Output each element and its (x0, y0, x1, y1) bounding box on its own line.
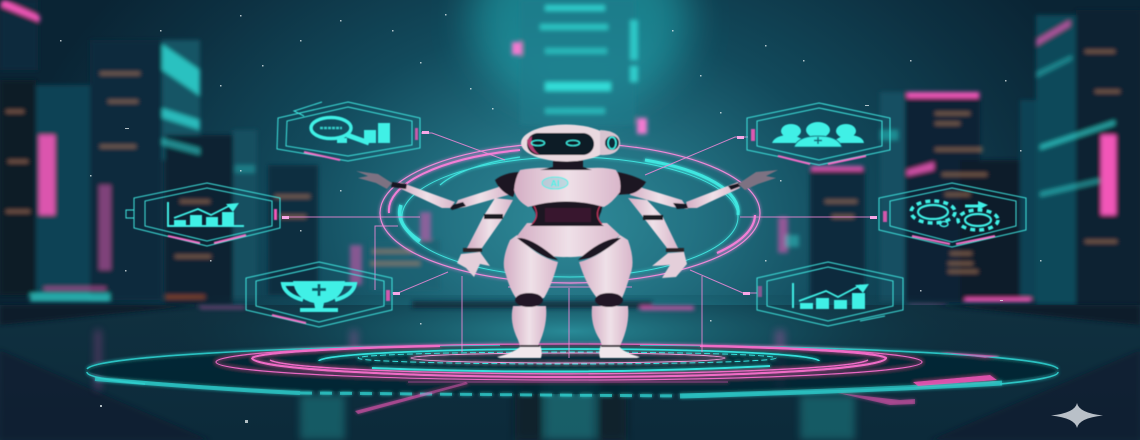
robot head (521, 124, 620, 162)
hexagon: growth chart left (126, 183, 280, 246)
top light glow (470, 0, 690, 110)
robot eyes (532, 140, 580, 146)
icon: three people (772, 122, 864, 147)
icon: bar chart with arrow (168, 202, 244, 226)
robot right shoulder (612, 171, 646, 195)
connector lines (282, 131, 877, 358)
outer dashed cyan ring (95, 379, 300, 393)
left building windows (6, 72, 420, 299)
icon: magnifier and bars (311, 118, 390, 143)
corner sparkle mark (1051, 403, 1103, 428)
central tower (512, 0, 647, 134)
robot torso (514, 168, 620, 207)
chest AI emblem: AI (550, 178, 560, 188)
hexagon: team (747, 103, 890, 165)
icon: gears and arrow (911, 201, 998, 230)
floor (0, 295, 1140, 440)
hexagon: trophy (246, 262, 392, 327)
right city buildings (778, 10, 1140, 310)
background sky (0, 0, 1140, 310)
hexagon: gears (879, 183, 1026, 247)
outer cyan ring (87, 345, 1058, 384)
robot left shoulder (495, 172, 522, 197)
hexagon: growth chart right (757, 262, 903, 326)
icon: bar chart with arrow right (793, 283, 869, 309)
robot pelvis (517, 223, 620, 257)
robot right arms (612, 170, 778, 278)
robot left leg (497, 235, 558, 358)
outer pink ring (216, 344, 922, 380)
hexagon: analytics search (277, 102, 420, 161)
floor reflections (95, 330, 855, 440)
robot ear (605, 136, 619, 150)
circular HUD rings around robot (380, 143, 760, 283)
inner cyan rings (319, 349, 819, 361)
left city buildings (0, 0, 440, 305)
icon: trophy cup (283, 281, 355, 312)
robot right leg (579, 235, 640, 358)
left building neon (0, 0, 431, 302)
inner pink ring (252, 346, 886, 377)
right building windows (825, 50, 1120, 273)
robot waist (528, 200, 604, 226)
robot neck (540, 160, 592, 170)
robot (356, 124, 778, 358)
right building neon (778, 20, 1116, 309)
robot left arms (356, 171, 522, 277)
holographic floor rings (86, 344, 1058, 414)
chest AI emblem (542, 177, 568, 189)
pink floor accents (913, 375, 997, 386)
